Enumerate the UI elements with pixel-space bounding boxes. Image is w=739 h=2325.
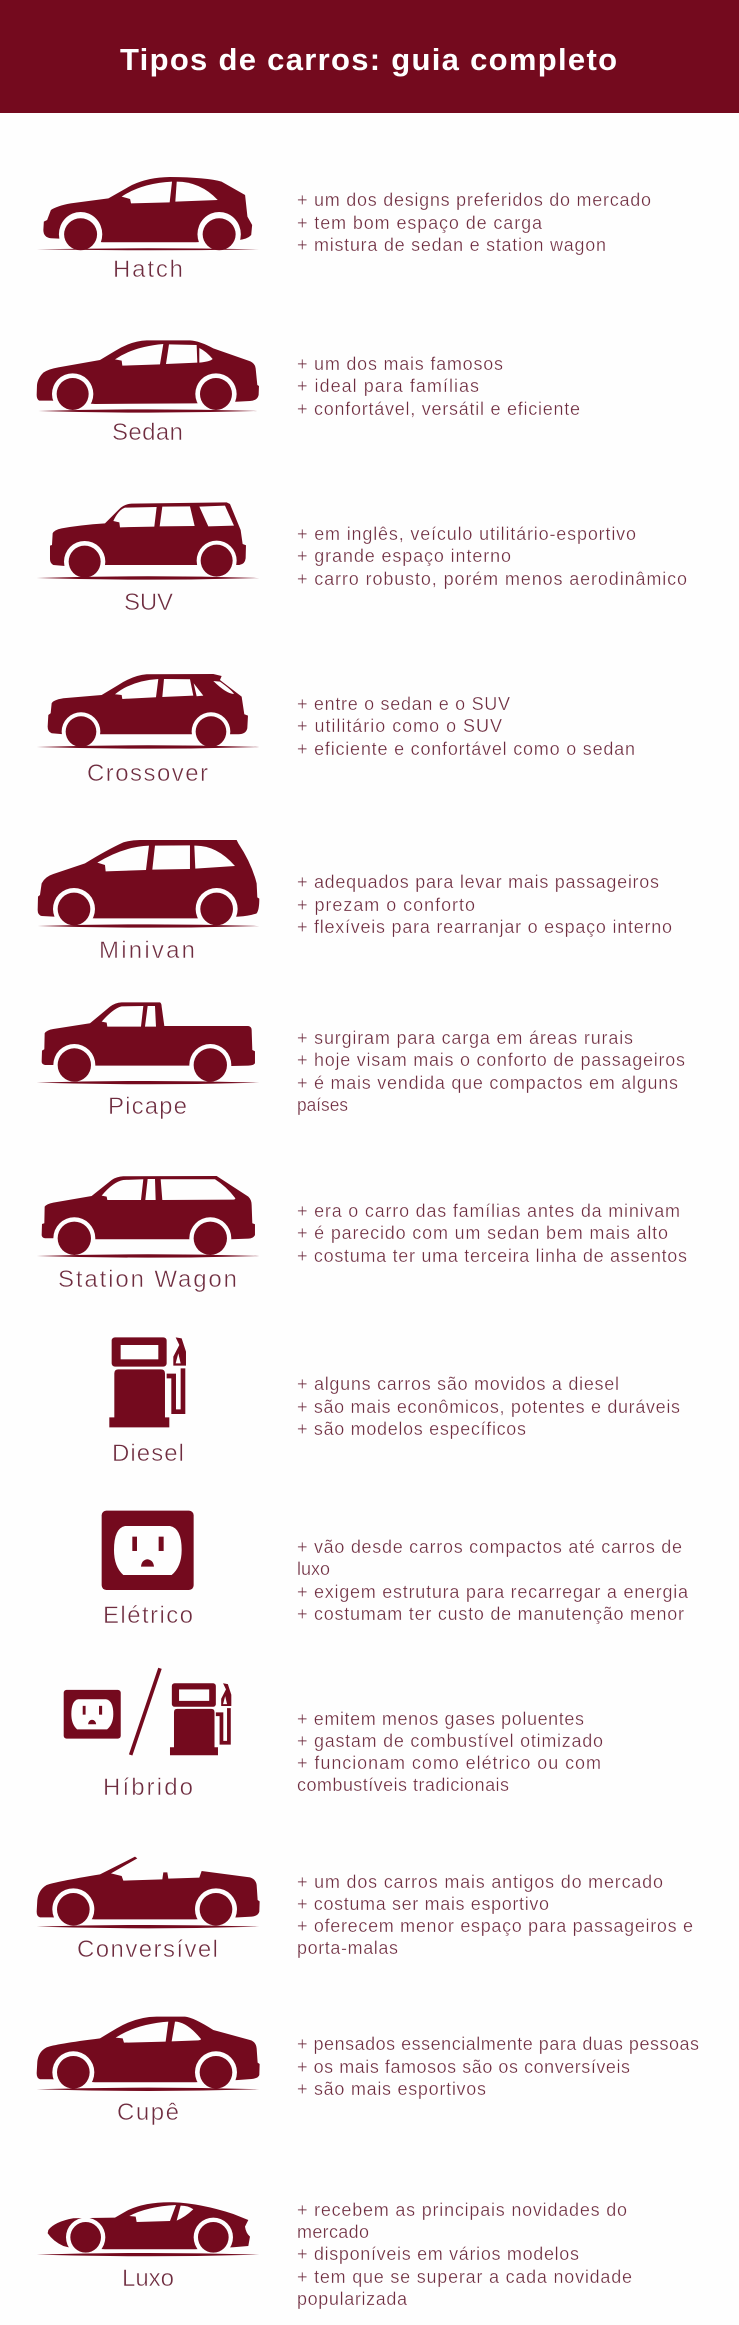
text: Hatch bullet list xyxy=(297,190,651,255)
icon: SUV car xyxy=(37,502,259,582)
text: Minivan bullet list: + prezam o conforto xyxy=(297,895,475,915)
text: SUV bullet list: + carro robusto, porém menos aerodinâmico xyxy=(297,569,687,589)
label: Station Wagon: Station Wagon xyxy=(58,1266,237,1293)
icon: station wagon car xyxy=(37,1176,259,1259)
text: Diesel bullet list: + são modelos específicos xyxy=(297,1419,526,1439)
text: Crossover bullet list: + eficiente e confortável como o sedan xyxy=(297,739,635,759)
text: Hatch bullet list: + tem bom espaço de carga xyxy=(297,213,543,233)
text: Cupê bullet list: + os mais famosos são os conversíveis xyxy=(297,2057,630,2077)
text: SUV bullet list: + em inglês, veículo utilitário-esportivo xyxy=(297,524,636,544)
text: Picape bullet list: + surgiram para carga em áreas rurais xyxy=(297,1028,633,1048)
text: Station Wagon bullet list: + costuma ter uma terceira linha de assentos xyxy=(297,1246,687,1266)
text: Crossover bullet list xyxy=(297,694,635,759)
text: Cupê bullet list xyxy=(297,2034,699,2099)
text: Crossover bullet list: + utilitário como o SUV xyxy=(297,716,502,736)
text: Picape bullet list xyxy=(297,1028,685,1115)
text: Luxo bullet list: + tem que se superar a cada novidade xyxy=(297,2267,632,2287)
text: Luxo bullet list: + disponíveis em vários modelos xyxy=(297,2244,579,2264)
text: Minivan bullet list: + flexíveis para rearranjar o espaço interno xyxy=(297,917,672,937)
icon: power outlet xyxy=(102,1511,194,1590)
icon: fuel pump xyxy=(109,1337,186,1427)
panel: Luxo xyxy=(37,2200,632,2309)
slash divider xyxy=(131,1668,160,1755)
text: Elétrico bullet list: + costumam ter custo de manutenção menor xyxy=(297,1604,684,1624)
text: Sedan bullet list xyxy=(297,354,580,419)
title banner: Tipos de carros: guia completo xyxy=(120,42,617,77)
panel: SUV xyxy=(37,502,687,616)
panel: Cupê xyxy=(37,2017,699,2126)
text: Minivan bullet list xyxy=(297,872,672,937)
text: Hatch bullet list: + mistura de sedan e station wagon xyxy=(297,235,606,255)
panel: Híbrido xyxy=(64,1668,603,1801)
icon: outlet slash fuel pump xyxy=(64,1668,231,1755)
label: Crossover: Crossover xyxy=(87,760,208,787)
text: Cupê bullet list: + pensados essencialmente para duas pessoas xyxy=(297,2034,699,2054)
text: Luxo bullet list: popularizada xyxy=(297,2289,408,2309)
text: Luxo bullet list: mercado xyxy=(297,2222,369,2242)
text: Station Wagon bullet list xyxy=(297,1201,687,1266)
label: Luxo: Luxo xyxy=(122,2265,174,2292)
panel: Hatch xyxy=(37,177,651,283)
text: Sedan bullet list: + ideal para famílias xyxy=(297,376,479,396)
text: Luxo bullet list: + recebem as principais novidades do xyxy=(297,2200,627,2220)
text: Elétrico bullet list: + exigem estrutura para recarregar a energia xyxy=(297,1582,689,1602)
text: Luxo bullet list xyxy=(297,2200,632,2309)
panel: Crossover xyxy=(37,674,635,787)
panel: Station Wagon xyxy=(37,1176,687,1293)
icon: coupe car xyxy=(37,2017,260,2093)
text: Minivan bullet list: + adequados para levar mais passageiros xyxy=(297,872,659,892)
text: Conversível bullet list: + oferecem menor espaço para passageiros e xyxy=(297,1916,693,1936)
panel: Elétrico xyxy=(102,1511,689,1629)
text: Sedan bullet list: + um dos mais famosos xyxy=(297,354,503,374)
label: Minivan: Minivan xyxy=(99,937,195,964)
text: Hatch bullet list: + um dos designs preferidos do mercado xyxy=(297,190,651,210)
text: Diesel bullet list: + alguns carros são movidos a diesel xyxy=(297,1374,619,1394)
icon: pickup truck xyxy=(37,1002,259,1086)
label: Sedan: Sedan xyxy=(112,419,183,446)
icon: small fuel pump xyxy=(170,1683,231,1755)
text: Elétrico bullet list: + vão desde carros compactos até carros de xyxy=(297,1537,682,1557)
text: Híbrido bullet list: + gastam de combustível otimizado xyxy=(297,1731,603,1751)
text: Híbrido bullet list: + emitem menos gases poluentes xyxy=(297,1709,584,1729)
panel: Minivan xyxy=(38,840,672,964)
label: SUV: SUV xyxy=(124,589,173,616)
icon: sedan car xyxy=(37,340,259,415)
label: Cupê: Cupê xyxy=(117,2099,179,2126)
label: Hatch: Hatch xyxy=(113,256,183,283)
icon: small outlet xyxy=(64,1690,121,1739)
icon: hatch car xyxy=(37,177,259,257)
icon: luxury sports car xyxy=(37,2202,259,2257)
text: Station Wagon bullet list: + é parecido com um sedan bem mais alto xyxy=(297,1223,668,1243)
text: SUV bullet list xyxy=(297,524,687,589)
text: Crossover bullet list: + entre o sedan e o SUV xyxy=(297,694,510,714)
text: Picape bullet list: + hoje visam mais o conforto de passageiros xyxy=(297,1050,685,1070)
panel: Diesel xyxy=(109,1337,680,1467)
text: SUV bullet list: + grande espaço interno xyxy=(297,546,511,566)
text: Diesel bullet list xyxy=(297,1374,680,1439)
icon: convertible car xyxy=(37,1857,260,1930)
text: Sedan bullet list: + confortável, versátil e eficiente xyxy=(297,399,580,419)
text: Station Wagon bullet list: + era o carro das famílias antes da minivam xyxy=(297,1201,680,1221)
text: Cupê bullet list: + são mais esportivos xyxy=(297,2079,486,2099)
text: Conversível bullet list xyxy=(297,1872,693,1958)
text: Diesel bullet list: + são mais econômicos, potentes e duráveis xyxy=(297,1397,680,1417)
text: Híbrido bullet list: combustíveis tradicionais xyxy=(297,1775,509,1795)
text: Elétrico bullet list: luxo xyxy=(297,1559,330,1579)
panel: Conversível xyxy=(37,1857,693,1963)
label: Híbrido: Híbrido xyxy=(103,1774,193,1801)
text: Elétrico bullet list xyxy=(297,1537,689,1624)
text: Picape bullet list: + é mais vendida que compactos em alguns xyxy=(297,1073,678,1093)
icon: minivan car xyxy=(38,840,259,930)
text: Híbrido bullet list xyxy=(297,1709,603,1795)
text: Híbrido bullet list: + funcionam como elétrico ou com xyxy=(297,1753,601,1773)
text: Conversível bullet list: porta-malas xyxy=(297,1938,398,1958)
text: Conversível bullet list: + costuma ser mais esportivo xyxy=(297,1894,549,1914)
label: Elétrico: Elétrico xyxy=(103,1602,193,1629)
label: Picape: Picape xyxy=(108,1093,187,1120)
text: Picape bullet list: países xyxy=(297,1095,348,1115)
icon: crossover car xyxy=(37,674,259,751)
title banner xyxy=(0,0,739,113)
text: Conversível bullet list: + um dos carros mais antigos do mercado xyxy=(297,1872,663,1892)
panel: Sedan xyxy=(37,340,580,446)
label: Conversível: Conversível xyxy=(77,1936,218,1963)
label: Diesel: Diesel xyxy=(112,1440,184,1467)
panel: Picape xyxy=(37,1002,685,1120)
